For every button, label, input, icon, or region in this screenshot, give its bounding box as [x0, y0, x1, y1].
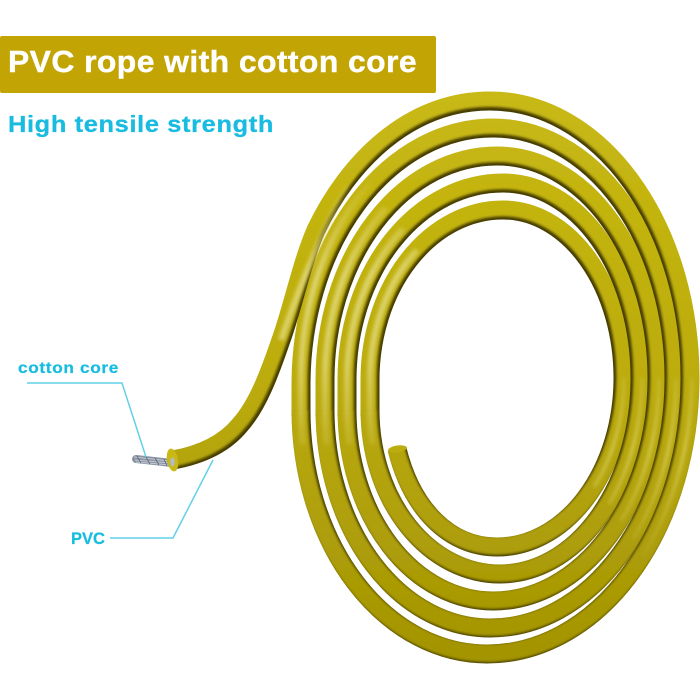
callout: cotton core — [18, 360, 146, 457]
callout: PVC: PVC — [71, 529, 105, 548]
subtitle: High tensile strength — [8, 111, 274, 137]
callout: cotton core: cotton core — [18, 360, 119, 377]
rope inner end cap — [388, 444, 407, 454]
callout: PVC — [71, 460, 213, 548]
coiled yellow rope — [169, 98, 692, 654]
rope cut end — [165, 448, 180, 472]
title banner — [0, 36, 436, 93]
title banner: PVC rope with cotton core — [8, 44, 417, 79]
cotton core strands — [134, 456, 172, 466]
